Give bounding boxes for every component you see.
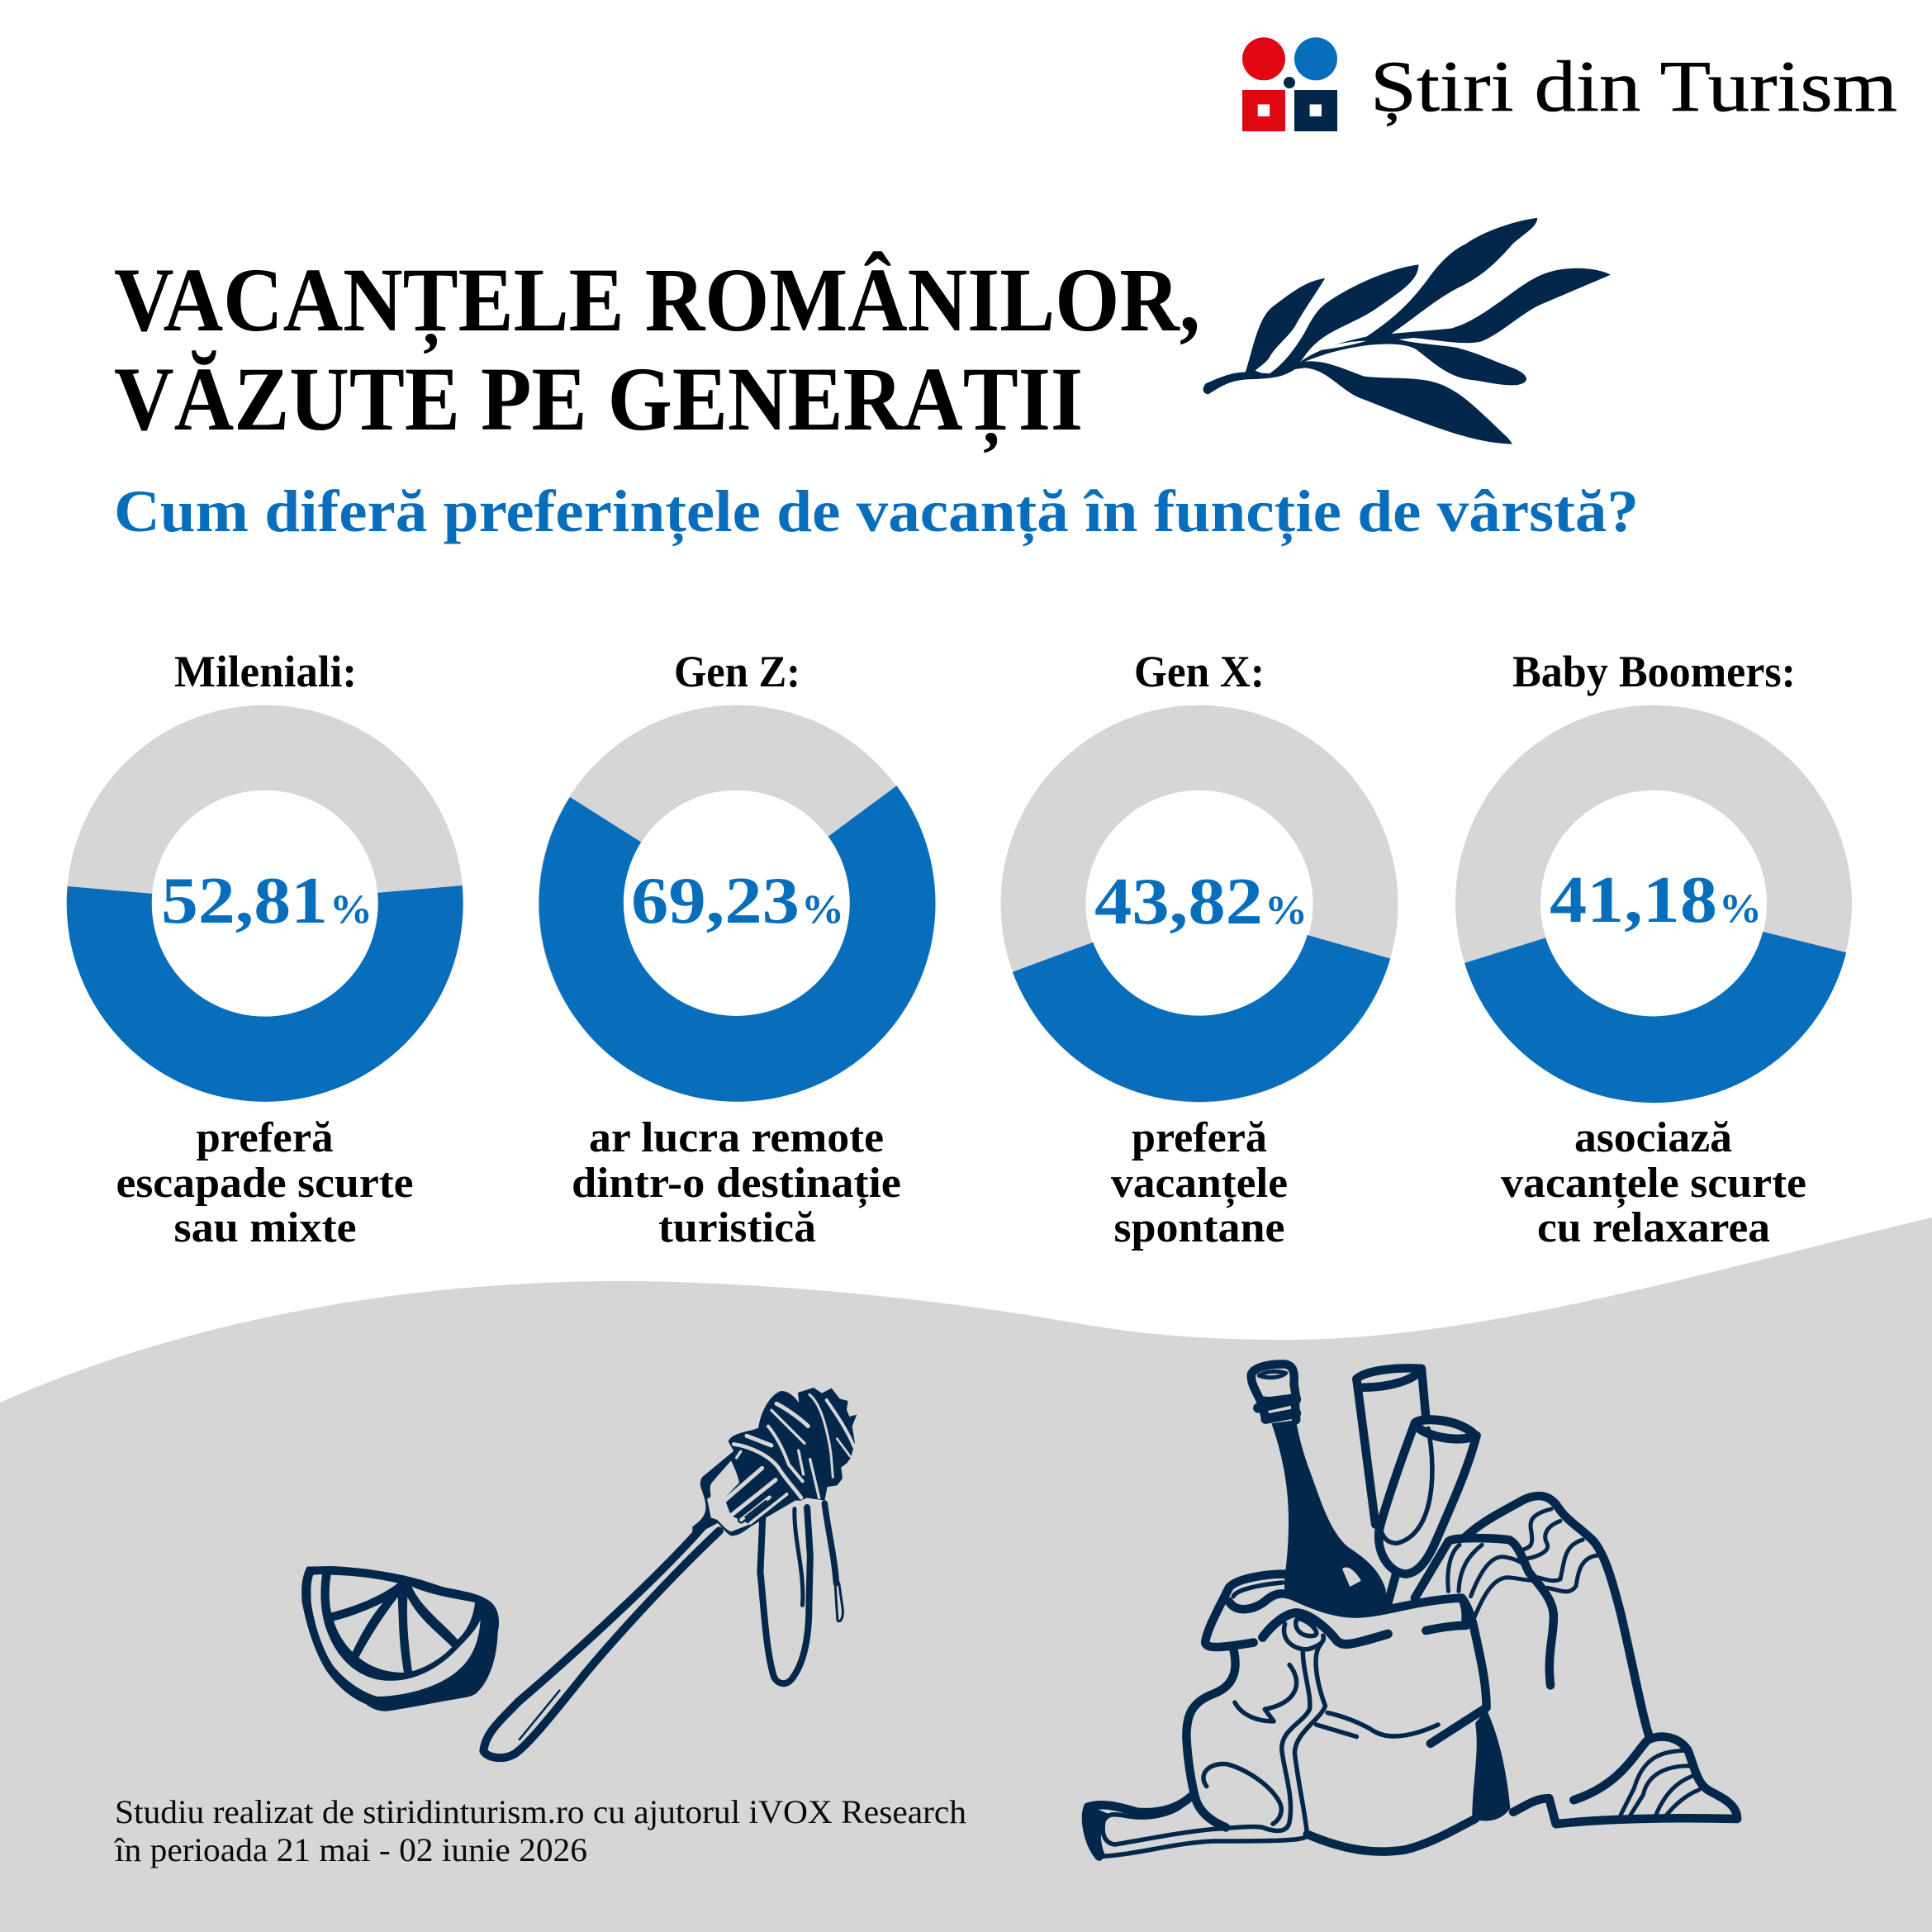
donut: 52,81%: [67, 748, 463, 1102]
value: 43,82%: %: [1265, 886, 1308, 933]
bag body: [1085, 1574, 1510, 1858]
description: Baby Boomers: [1501, 1114, 1806, 1251]
description: Gen X: vacanțele: [1111, 1160, 1288, 1208]
donut: 69,23%: [539, 748, 936, 1102]
heading: Mileniali: Mileniali:: [174, 647, 357, 696]
striped towel: [1415, 1496, 1737, 1824]
source note: [114, 1793, 966, 1868]
title: VĂZUTE PE GENERAȚII: [114, 349, 1083, 453]
logo: [1242, 37, 1897, 131]
description: Gen Z: dintr-o destinație: [572, 1160, 901, 1208]
description: Gen X: spontane: [1113, 1204, 1285, 1251]
donut: 43,82%: [1013, 748, 1390, 1102]
title: VACANȚELE ROMÂNILOR,: [114, 249, 1200, 354]
value: 52,81%: %: [330, 885, 373, 932]
chart: Gen X: [1013, 647, 1390, 1251]
value: 69,23%: 69,23: [631, 865, 800, 938]
chart: Mileniali: [67, 647, 463, 1251]
source note: Studiu realizat de stiridinturism.ro cu ajutorul iVOX Research: [115, 1793, 966, 1830]
chart: Baby Boomers: [1464, 647, 1846, 1251]
icon: fork with pasta: [483, 1388, 857, 1758]
chart: Gen Z: [539, 647, 936, 1251]
description: Baby Boomers: cu relaxarea: [1537, 1204, 1770, 1251]
description: Baby Boomers: vacanțele scurte: [1501, 1160, 1806, 1208]
source note: în perioada 21 mai - 02 iunie 2026: [114, 1831, 587, 1868]
description: Mileniali: sau mixte: [173, 1204, 357, 1251]
description: Gen Z: turistică: [658, 1204, 816, 1251]
pasta nest and fork head: [692, 1388, 857, 1536]
logo wordmark: Știri din Turism: [1370, 47, 1897, 127]
description: Baby Boomers: asociază: [1574, 1114, 1732, 1161]
description: Mileniali: [116, 1114, 413, 1251]
logo mark: [1242, 37, 1337, 131]
champagne bottle: [1251, 1364, 1387, 1615]
pasta highlights: [733, 1394, 854, 1498]
description: Gen Z: [572, 1114, 901, 1251]
value: 69,23%: [631, 865, 844, 938]
description: Mileniali: escapade scurte: [116, 1160, 413, 1207]
value: 43,82%: [1094, 866, 1308, 938]
description: Gen X: preferă: [1132, 1114, 1267, 1161]
subtitle: Cum diferă preferințele de vacanță în funcție de vârstă?: [114, 478, 1639, 547]
value: 52,81%: 52,81: [161, 865, 328, 938]
description: Mileniali: preferă: [197, 1114, 334, 1161]
value: 41,18%: 41,18: [1550, 864, 1717, 937]
value: 41,18%: %: [1719, 885, 1762, 931]
description: Gen Z: ar lucra remote: [589, 1114, 884, 1161]
value: 69,23%: %: [801, 885, 844, 932]
icon: olive branch: [1203, 218, 1611, 444]
fork handle and hanging strands: [483, 1503, 843, 1758]
title: [114, 249, 1200, 453]
background wave panel: [0, 1218, 1932, 1932]
fork head: [692, 1451, 795, 1536]
description: Gen X: [1111, 1114, 1288, 1251]
icon: beach bag with bottle and glasses: [1085, 1364, 1737, 1858]
donut: 41,18%: [1464, 748, 1846, 1103]
heading: Gen X: Gen X:: [1134, 647, 1265, 696]
heading: Gen Z: Gen Z:: [674, 647, 800, 696]
champagne glasses: [1356, 1368, 1477, 1603]
heading: Baby Boomers: Baby Boomers:: [1512, 647, 1796, 696]
value: 43,82%: 43,82: [1094, 866, 1263, 938]
icon: lemon slice: [301, 1566, 499, 1711]
